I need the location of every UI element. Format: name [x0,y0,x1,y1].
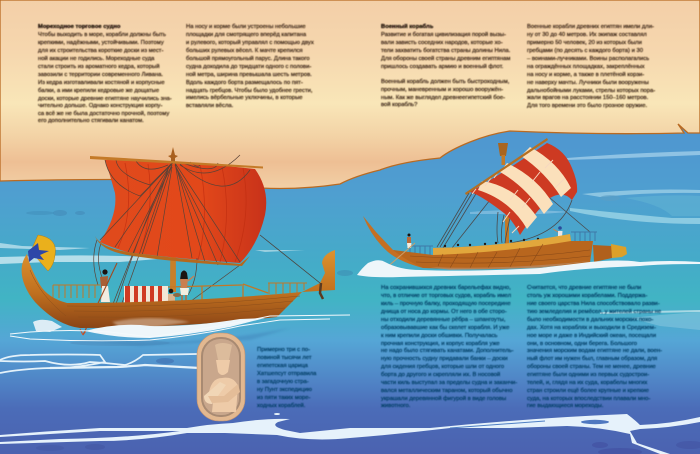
relief figure: crowned ruler [204,343,240,412]
upper and lower yards [90,156,263,168]
text block: warship construction: ны отходили деревянные рёбра – шпангоуты, [381,317,506,323]
heading and text: warship: вой корабль? [381,101,418,108]
text block: warship construction: части киль выступал за пределы судна и заканчи- [381,380,517,386]
water streaks and highlights [0,151,700,454]
text block: Egyptian shipbuilders [527,285,662,409]
text block: warship continued: на ограждённых площадках, закреплённых [527,64,645,70]
text block: warship continued: Военные корабли древних египтян имели дли- [527,24,654,30]
heading and text: merchant ship [38,24,172,124]
person: seated [168,289,181,304]
warship oar [385,243,415,269]
text block: Egyptian shipbuilders: ный флот им нужен был, главным образом, для [527,355,657,362]
text block: Punt expedition [257,347,317,409]
text block: warship continued: гребцами (по десять с каждого борта) и 30 [527,48,644,54]
text block: warship construction: что, в отличие от торговых судов, корабль имел [381,293,511,299]
warship rigging [437,192,590,248]
text block: warship construction: борта до другого и скрепляли их. В носовой [381,371,500,378]
text block: warship continued: Для того времени это было грозное оружие. [527,103,648,109]
text block: warship construction: не надо было стягивать канатами. Дополнитель- [381,348,514,354]
stay rope [260,235,320,283]
text block: warship construction: к ним крепили доски обшивки. Получалась [381,333,497,339]
text block: warship construction: для сидения гребцов, которые шли от одного [381,364,504,370]
text block: warship continued: не наверху мачты. Лучники были вооружены [527,80,649,86]
sail stripes [478,181,537,229]
text block: warship construction: украшали деревянной фигурой в виде головы [381,395,506,402]
text block: Egyptian shipbuilders: Считается, что древние египтяне не были [527,285,641,291]
text block: Egyptian shipbuilders: дах. Хотя на кораблях и выходили в Средизем- [527,325,656,331]
text block: Egyptian shipbuilders: обороны своей страны. Тем не менее, древние [527,363,656,370]
text block: Egyptian shipbuilders: гие выдающиеся мореходы. [527,403,604,409]
text block: Egyptian shipbuilders: столь уж хорошими корабелами. Поддержа- [527,293,647,299]
shadows on water [60,328,290,346]
text block: Egyptian shipbuilders: тию земледелия и ремёсел, у жителей страны не [527,308,661,315]
heading and text: merchant ship: балки, а ими крепили кедровые же дощатые [38,88,159,94]
heading and text: merchant ship: са всё же не была достаточно прочной, поэтому [38,110,169,117]
heading and text: merchant ship: доски, которые древние египтяне научились зна- [38,96,172,102]
heading and text: warship: Развитие и богатая цивилизация порой вызы- [381,31,506,38]
text block: merchant ship continued: и рулевого, который управлял с помощью двух [186,39,314,46]
warship crew [407,226,562,248]
text block: warship construction: прочная конструкция, и корпус корабля уже [381,341,500,347]
text block: Punt expedition: ловиной тысячи лет [257,354,312,361]
rails [53,283,307,303]
heading and text: warship: пришлось создавать армию и военный флот. [381,63,504,70]
text block: merchant ship continued: больших рулевых вёсел. К мачте крепился [186,48,303,54]
text block: warship continued [527,24,655,109]
text block: merchant ship continued: имелись вёрбельные уключины, в которые [186,95,303,101]
text block: Punt expedition: в загадочную стра- [257,379,309,385]
text block: Punt expedition: египетская царица [257,363,309,369]
text block: warship continued: дальнобойными луками, стрелы которых пора- [527,87,655,94]
warship [357,138,700,277]
text block: warship construction: днища от носа до кормы. От него в обе сторо- [381,309,507,315]
text block: Egyptian shipbuilders: суда, на которых впоследствии плавали мно- [527,396,650,402]
text block: merchant ship continued: ной метра, ширина превышала шесть метров. [186,71,312,78]
stern lotus ornament [28,235,55,271]
text block: warship construction: образовывавшие как бы скелет корабля. И уже [381,325,509,331]
sail: red [100,160,266,263]
heading and text: merchant ship: завозили с территории современного Ливана. [38,72,163,78]
text block: warship construction: киль – прочную балку, проходящую посередине [381,301,511,307]
heading and text: warship: ным. Как же выглядел древнеегипетский бое- [381,94,505,101]
text block: merchant ship continued [186,24,314,109]
heading and text: warship: Военный корабль должен быть быстроходным, [381,78,510,85]
text block: Punt expedition: ну Пунт экспедицию [257,387,313,393]
warship foam [357,260,700,277]
person: standing woman [180,270,194,303]
foam [10,315,350,341]
text block: Egyptian shipbuilders: они, в основном, одни берега. Большого [527,341,637,347]
text block: warship continued: – воинами-лучниками. Воины располагались [527,56,649,62]
heading and text: merchant ship: крепкими, надёжными, устойчивыми. Поэтому [38,39,164,46]
text block: merchant ship continued: судна доходила до тридцати одного с полови- [186,64,311,70]
heading and text: merchant ship: чительно дольше. Однако конструкция корпу- [38,103,162,109]
sand shore panel [0,0,700,188]
text block: warship construction: вался металлическим тараном, который обычно [381,387,512,394]
sail rigging [94,155,250,304]
water background [0,130,700,454]
text block: warship continued: на носу и корме, а также в плетёной корзи- [527,71,644,78]
text block: warship continued: примерно 50 человек, 20 из которых были [527,40,642,46]
heading and text: merchant ship: ной акации не годились. Мореходные суда [38,55,155,62]
bottom white wave [0,413,700,454]
text block: merchant ship continued: площадки для смотрящего вперёд капитана [186,32,307,38]
person: steersman [100,269,110,302]
text block: merchant ship continued: большой прямоугольный парус. Длина такого [186,55,310,62]
stern post [363,216,423,268]
text block: Egyptian shipbuilders: ное море и даже в Индийский океан, посещали [527,332,656,339]
text block: Egyptian shipbuilders: телей, и, глядя на их суда, корабелы многих [527,379,647,386]
heading and text: merchant ship: для их строительства короткие доски из мест- [38,48,163,54]
text block: warship continued: жали врагов на расстоянии 150–160 метров. [527,95,649,101]
text block: Egyptian shipbuilders: ние своего царства Нила способствовало разви- [527,301,660,307]
text block: Punt expedition: Хатшепсут отправила [257,371,317,377]
text block: warship construction [381,285,517,409]
warship hull [393,235,593,269]
oar [83,263,117,335]
crow's nest and mast [498,143,509,246]
text block: warship construction: животного. [381,403,411,409]
text block: Punt expedition: из пяти таких море- [257,395,310,401]
striped cloth [124,286,168,304]
text block: warship continued: ну от 30 до 40 метров. Их экипаж составлял [527,32,647,38]
heading and text: merchant ship: Из кедра изготавливали костяной и корпусные [38,79,165,86]
stern rail [407,232,597,256]
heading and text: merchant ship: его дополнительно стягивали канатом. [38,118,144,124]
heading and text: merchant ship: Чтобы выходить в море, корабли должны быть [38,32,166,38]
text block: warship construction: ную прочность судну придавали банки – доски [381,356,508,362]
text block: Punt expedition: Примерно три с по- [257,347,310,353]
left white wave network [0,354,200,373]
heading and text: merchant ship: Мореходное торговое судно [38,24,121,30]
merchant ship [10,147,350,346]
text block: merchant ship continued: вставляли вёсла. [186,103,234,109]
text block: warship construction: На сохранившихся древних барельефах видно, [381,285,511,291]
heading and text: warship: Военный корабль [381,23,434,30]
text block: merchant ship continued: надцать гребцов. Чтобы было удобнее грести, [186,88,313,94]
hull [22,250,335,328]
cartouche relief [197,333,245,421]
heading and text: warship: вали зависть соседних народов, которые хо- [381,40,503,46]
warship yard [465,138,548,195]
text block: Egyptian shipbuilders: стран строили ещё более крупные и крепкие [527,388,649,394]
heading and text: warship [381,23,511,108]
heading and text: warship: прочным, маневренным и хорошо вооружён- [381,87,503,93]
heading and text: warship: Для обороны своей страны древним египтянам [381,55,510,62]
text block: Egyptian shipbuilders: было необходимости в дальних морских похо- [527,317,653,323]
warship bow with ram [593,244,627,262]
text block: Egyptian shipbuilders: значения морским водам египтяне не дали, воен- [527,348,662,354]
mast [170,165,176,292]
text block: Punt expedition: ходных кораблей. [257,402,306,409]
text block: Egyptian shipbuilders: египтяне были одними из первых судострои- [527,372,649,378]
heading and text: merchant ship: стали строить из ароматного кедра, который [38,63,160,70]
heading and text: warship: тели захватить богатства страны долины Нила. [381,48,511,54]
text block: merchant ship continued: Вдоль каждого борта размещалось по пят- [186,80,303,86]
text block: merchant ship continued: На носу и корме были устроены небольшие [186,24,306,30]
warship sail [470,143,577,235]
